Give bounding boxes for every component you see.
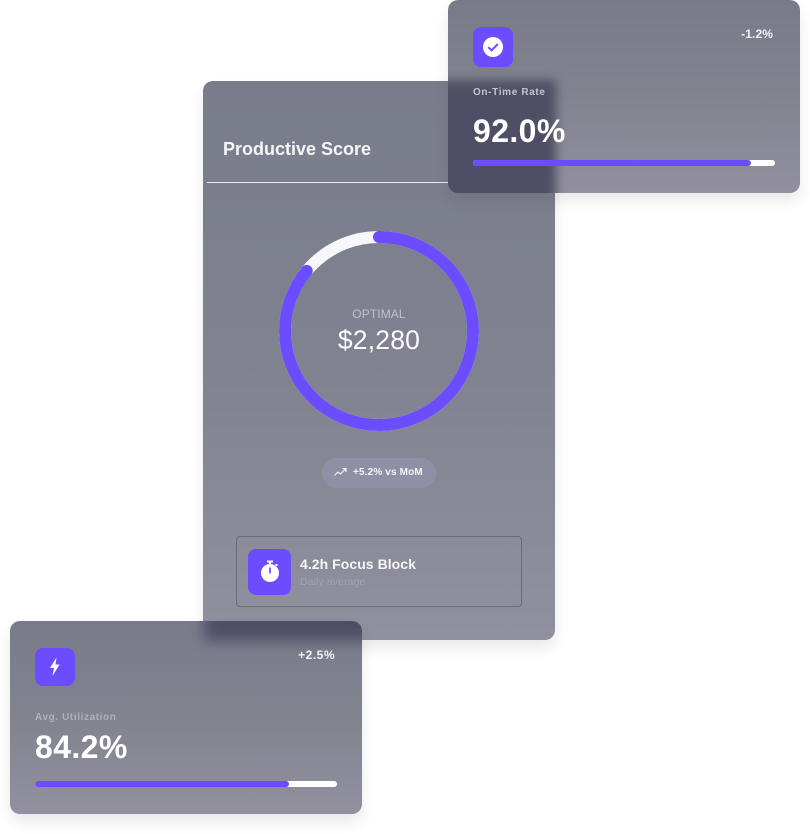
donut chart: optimal score bbox=[279, 231, 479, 431]
panel: focus block bbox=[236, 536, 522, 607]
donut value: $2,280 bbox=[338, 325, 420, 355]
value: 84.2%: 84.2% bbox=[35, 729, 128, 765]
focus block subtitle: Daily average bbox=[300, 576, 366, 588]
label: on-time rate: On-Time Rate bbox=[473, 87, 546, 98]
panel: productive score bbox=[203, 81, 555, 640]
progress bar: 84.2% bbox=[35, 781, 337, 787]
focus block title: 4.2h Focus Block bbox=[300, 556, 416, 572]
icon: trend arrow bbox=[334, 468, 347, 476]
progress bar: 92% bbox=[473, 160, 775, 166]
trend pill bbox=[322, 458, 436, 488]
icon: lightning bolt bbox=[35, 648, 75, 686]
change: +2.5%: +2.5% bbox=[298, 648, 335, 662]
label: avg. utilization: Avg. Utilization bbox=[35, 712, 116, 723]
value: 92.0%: 92.0% bbox=[473, 113, 566, 149]
icon: stopwatch bbox=[248, 549, 291, 595]
trend text: +5.2% vs MoM bbox=[353, 467, 423, 478]
panel: avg. utilization bbox=[10, 621, 362, 814]
donut label: optimal: OPTIMAL bbox=[352, 307, 406, 321]
heading: productive score: Productive Score bbox=[223, 139, 371, 159]
panel: on-time rate bbox=[448, 0, 800, 193]
change: -1.2%: -1.2% bbox=[741, 27, 773, 41]
icon: check badge bbox=[473, 27, 513, 67]
